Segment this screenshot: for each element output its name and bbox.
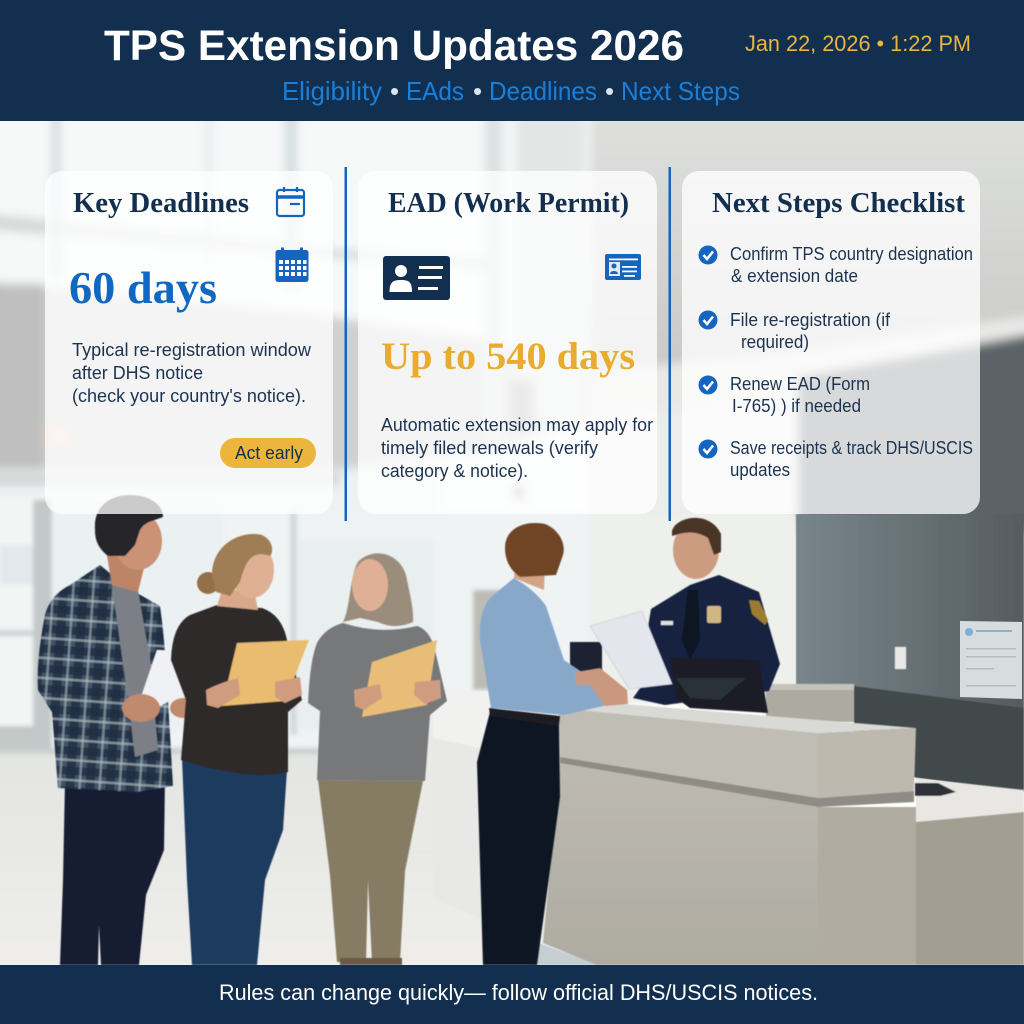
- navy uniform: [633, 575, 780, 705]
- grey t-shirt: [112, 585, 158, 757]
- hair: [343, 553, 413, 626]
- divider left: [344, 167, 347, 521]
- check item 3: I-765) ) if needed: [732, 396, 861, 416]
- officer behind desk: [570, 518, 780, 713]
- counter top: [559, 703, 916, 733]
- body text: Automatic extension may apply for: [381, 415, 653, 435]
- panel: key deadlines: [45, 171, 333, 514]
- person 4: staff seen from behind: [477, 523, 672, 965]
- check item 4: [698, 438, 973, 480]
- panel: next steps checklist: [682, 171, 980, 514]
- dark screen behind papers: [570, 642, 602, 688]
- title: TPS Extension Updates 2026: [104, 22, 684, 70]
- hair: [212, 534, 272, 596]
- back white cabinet: [413, 728, 433, 851]
- footer note: Rules can change quickly— follow official DHS/USCIS notices.: [219, 980, 818, 1005]
- icon: calendar small: [277, 187, 304, 216]
- body text: (check your country's notice).: [72, 386, 306, 406]
- big number: 60 days: [69, 262, 217, 313]
- face: [230, 542, 274, 598]
- jeans: [182, 758, 287, 965]
- check item 1: [698, 244, 973, 286]
- date stamp: Jan 22, 2026 • 1:22 PM: [745, 31, 971, 56]
- manila folder: [362, 640, 437, 717]
- white papers: [590, 611, 672, 689]
- heading: EAD (Work Permit): [388, 188, 629, 219]
- head: [114, 512, 162, 570]
- icon: id card small: [605, 254, 641, 280]
- plaid shirt: [38, 565, 173, 792]
- subtitle: •: [473, 76, 482, 106]
- act early pill: [220, 438, 316, 468]
- check item 4: updates: [730, 460, 790, 480]
- hand: [122, 694, 160, 722]
- dark trousers: [477, 708, 560, 965]
- brown hair: [505, 523, 564, 577]
- subtitle: Deadlines: [489, 76, 597, 106]
- divider right: [668, 167, 671, 521]
- heading: Next Steps Checklist: [712, 188, 966, 219]
- neck: [217, 590, 258, 610]
- lower windows and floor: [0, 498, 797, 982]
- khaki pants: [318, 780, 423, 962]
- manila folder: [222, 640, 309, 706]
- counter front lower: [543, 762, 818, 965]
- tie: [682, 590, 700, 660]
- person 3: woman in grey sweater: [308, 553, 447, 965]
- check item 1: Confirm TPS country designation: [730, 244, 973, 264]
- grey sweater: [308, 623, 447, 781]
- upper background blurred behind cards: [0, 100, 1024, 530]
- arm sleeve: [38, 615, 128, 725]
- hands: [576, 668, 628, 706]
- floor wedge: [530, 940, 600, 965]
- white papers: [142, 650, 228, 708]
- hair: [95, 495, 163, 556]
- right side desk: [916, 778, 1024, 965]
- bun: [197, 572, 219, 594]
- icon: calendar grid: [276, 248, 308, 282]
- body text: Typical re-registration window: [72, 340, 312, 360]
- reception desk: [413, 691, 1024, 965]
- person 2: woman in dark sweater: [171, 534, 309, 965]
- neck: [106, 550, 146, 592]
- blue shirt: [480, 578, 607, 715]
- check item 1: & extension date: [731, 266, 858, 286]
- head: [673, 521, 719, 579]
- check item 2: required): [741, 332, 809, 352]
- icon: id card large: [383, 256, 450, 300]
- subtitle: •: [390, 76, 399, 106]
- shoulder patch: [749, 600, 768, 625]
- body text: after DHS notice: [72, 363, 203, 383]
- monitor base light: [676, 678, 746, 700]
- name tag: [661, 621, 673, 625]
- counter groove: [560, 757, 914, 807]
- check item 2: File re-registration (if: [730, 310, 891, 330]
- face: [352, 559, 388, 611]
- footer band: [0, 965, 1024, 1024]
- jeans: [60, 776, 165, 965]
- subtitle: •: [605, 76, 614, 106]
- check item 3: Renew EAD (Form: [730, 374, 870, 394]
- header band: [0, 0, 1024, 121]
- check item 2: [698, 310, 891, 352]
- gray wall panels: [766, 514, 1024, 792]
- act early pill: Act early: [235, 443, 303, 463]
- subtitle: EAds: [406, 76, 464, 106]
- computer monitor: [670, 657, 768, 713]
- subtitle: Next Steps: [621, 76, 740, 106]
- badge: [707, 606, 721, 623]
- heading: Key Deadlines: [73, 188, 249, 219]
- subtitle: Eligibility: [282, 76, 382, 106]
- dark sweater: [171, 605, 302, 775]
- big number: Up to 540 days: [381, 335, 635, 378]
- hair: [672, 518, 721, 555]
- neck: [514, 565, 545, 590]
- shoes: [340, 958, 402, 965]
- check item 4: Save receipts & track DHS/USCIS: [730, 438, 973, 458]
- panel: EAD work permit: [358, 171, 657, 514]
- belt: [489, 708, 560, 726]
- hands: [354, 680, 441, 710]
- second hand: [170, 698, 198, 718]
- hands: [206, 677, 302, 708]
- left white desk block: [433, 691, 490, 922]
- wall notice: [960, 621, 1022, 699]
- check item 3: [698, 374, 870, 416]
- body text: category & notice).: [381, 461, 528, 481]
- counter front upper: [559, 708, 818, 798]
- person 1: man in plaid shirt: [38, 495, 228, 965]
- body text: timely filed renewals (verify: [381, 438, 598, 458]
